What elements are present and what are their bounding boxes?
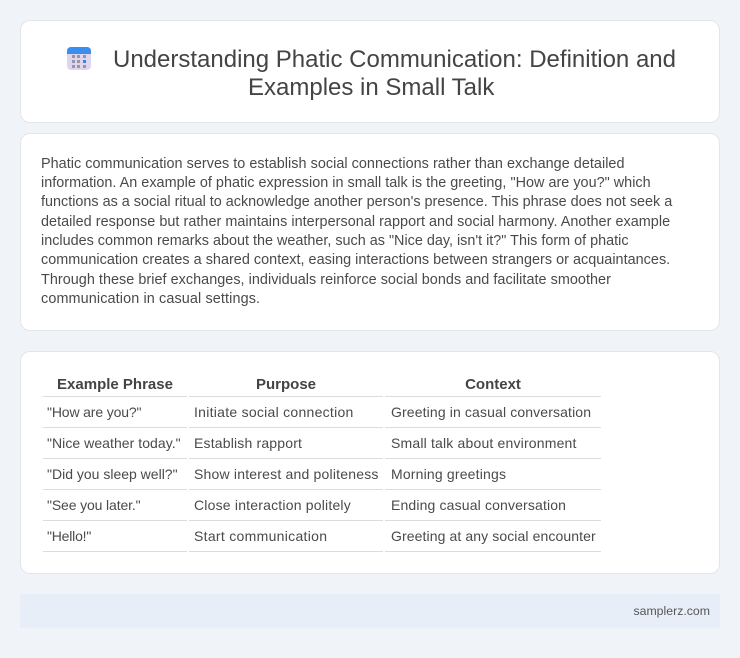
row 3: Show interest and politeness xyxy=(194,466,379,482)
text block: description: information. An example of phatic expression in small talk is the greeting, "How are you?" which xyxy=(41,175,651,191)
text block: description: communication creates a shared context, easing interactions between strangers or acquaintances. xyxy=(41,252,670,268)
table: phrases xyxy=(43,376,601,552)
text block: description xyxy=(41,156,672,307)
footer credit: samplerz.com xyxy=(633,604,710,618)
row 1: Initiate social connection xyxy=(194,404,354,420)
column headers: Example Phrase xyxy=(57,376,173,393)
row 5: "Hello!" xyxy=(47,528,91,544)
column headers: Purpose xyxy=(256,376,316,393)
column headers xyxy=(57,376,521,393)
row 1: Greeting in casual conversation xyxy=(391,404,591,420)
row 3 xyxy=(47,466,506,482)
row 5: Start communication xyxy=(194,528,327,544)
row 5 xyxy=(47,528,596,544)
panel: table xyxy=(20,351,720,574)
row 3: "Did you sleep well?" xyxy=(47,466,178,482)
row 2 xyxy=(47,435,577,451)
text block: description: detailed response but rather maintains interpersonal rapport and social harmony. Another example xyxy=(41,214,670,230)
text block: description: includes common remarks about the weather, such as "Nice day, isn't it?" This form of phatic xyxy=(41,233,629,249)
row 4: Ending casual conversation xyxy=(391,497,566,513)
title: Examples in Small Talk xyxy=(248,74,494,101)
icon: calendar xyxy=(67,47,91,70)
row 5: Greeting at any social encounter xyxy=(391,528,596,544)
text block: description: Through these brief exchanges, individuals reinforce social bonds and facilitate smoother xyxy=(41,272,611,288)
text block: description: communication in casual settings. xyxy=(41,291,260,307)
row 1: "How are you?" xyxy=(47,404,141,420)
footer xyxy=(20,594,720,628)
text block: description: Phatic communication serves to establish social connections rather than exchange detailed xyxy=(41,156,625,172)
row 4: "See you later." xyxy=(47,497,140,513)
panel: description xyxy=(20,133,720,331)
title: Understanding Phatic Communication: Definition and xyxy=(113,46,676,73)
title xyxy=(113,46,676,101)
row 1 xyxy=(47,404,591,420)
row 4: Close interaction politely xyxy=(194,497,351,513)
text block: description: functions as a social ritual to acknowledge another person's presence. This phrase does not seek a xyxy=(41,194,672,210)
row 3: Morning greetings xyxy=(391,466,506,482)
column headers: Context xyxy=(465,376,521,393)
row 2: Establish rapport xyxy=(194,435,302,451)
panel: header xyxy=(20,20,720,123)
row 2: Small talk about environment xyxy=(391,435,577,451)
row 4 xyxy=(47,497,566,513)
row 2: "Nice weather today." xyxy=(47,435,181,451)
